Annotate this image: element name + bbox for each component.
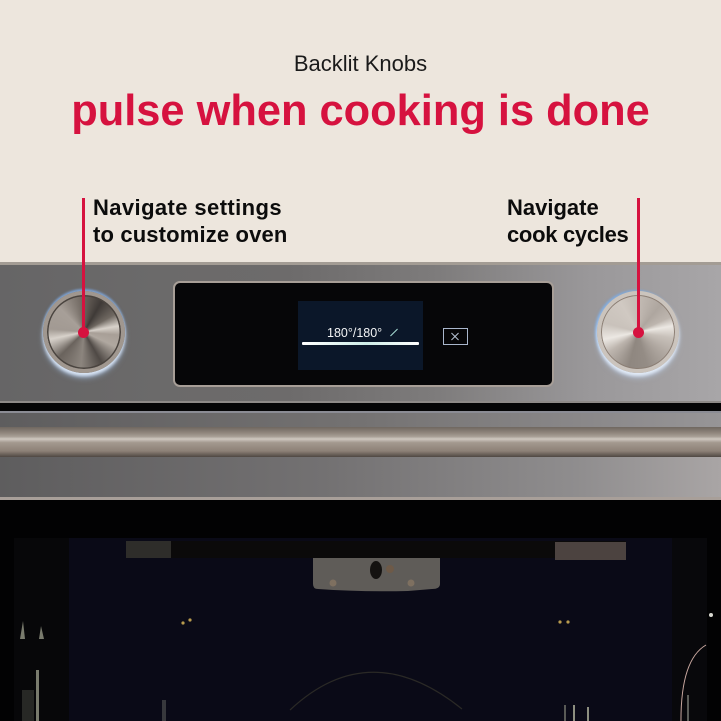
light bracket <box>313 558 440 591</box>
temperature readout: 180°/180° <box>327 326 382 340</box>
left callout text: to customize oven <box>93 222 287 246</box>
left callout text <box>93 195 287 246</box>
right side reflection <box>687 695 689 721</box>
rack reflections <box>162 700 589 721</box>
dark gap under fascia <box>0 401 721 413</box>
right callout text <box>507 195 628 246</box>
cancel cross <box>451 332 459 340</box>
blue screen <box>298 301 423 370</box>
lower door frame <box>0 457 721 500</box>
cancel button icon <box>443 328 468 345</box>
left callout text: Navigate settings <box>93 195 282 220</box>
left pointer dot <box>78 327 89 338</box>
rack studs <box>181 618 570 625</box>
oven control panel <box>0 262 721 500</box>
edit icon <box>390 329 398 336</box>
oven cavity <box>14 538 707 721</box>
right callout text: Navigate <box>507 195 599 220</box>
left pointer line <box>82 198 85 332</box>
progress bar <box>302 342 419 345</box>
right callout text: cook cycles <box>507 222 628 246</box>
side shadow columns <box>14 538 69 721</box>
title: pulse when cooking is done <box>71 87 650 135</box>
right knob <box>597 291 679 373</box>
handle rail backing <box>0 413 721 428</box>
right pointer line <box>637 198 640 332</box>
left side reflections <box>20 539 44 721</box>
door curve highlight <box>681 645 706 721</box>
right pointer dot <box>633 327 644 338</box>
oven window <box>0 500 721 721</box>
brushed steel fascia <box>0 262 721 403</box>
left knob <box>43 291 125 373</box>
display panel <box>173 281 554 387</box>
rack arcs <box>290 672 462 710</box>
top element bar <box>126 541 626 560</box>
oven handle <box>0 427 721 457</box>
subtitle: Backlit Knobs <box>294 51 427 76</box>
